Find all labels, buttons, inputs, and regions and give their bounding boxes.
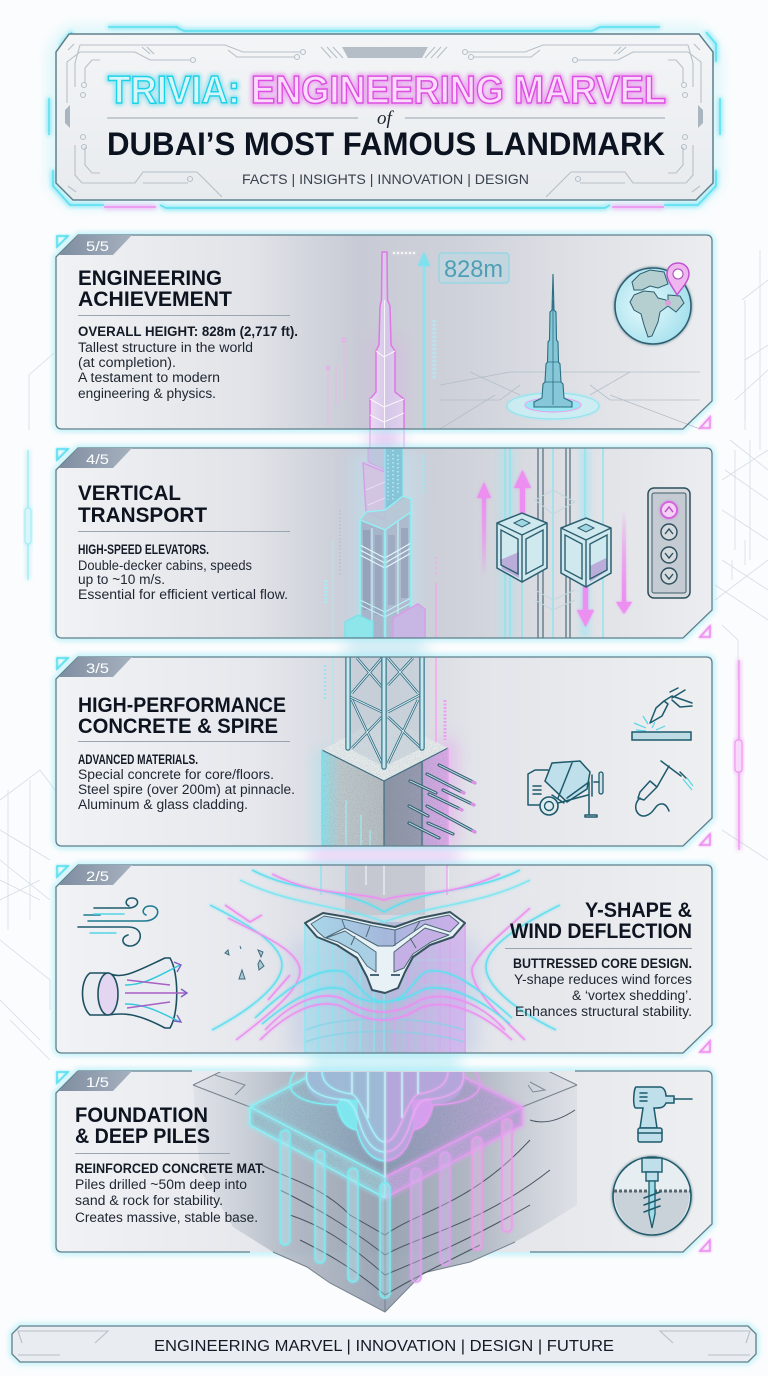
heading: ENGINEERING (78, 267, 222, 290)
panel body (56, 235, 712, 429)
body text: Special concrete for core/floors. (78, 767, 274, 782)
body text: sand & rock for stability. (75, 1193, 223, 1208)
banner outer glow frame (49, 27, 720, 208)
heading (78, 482, 207, 527)
right magenta glow rail (735, 660, 742, 850)
body text: Tallest structure in the world (78, 340, 253, 355)
corner marks (57, 1072, 710, 1251)
icon: elevator control panel (648, 488, 690, 598)
title banner (49, 27, 720, 208)
heading: HIGH-PERFORMANCE (78, 694, 286, 717)
footer frame (12, 1326, 756, 1362)
body text: (at completion). (78, 355, 176, 370)
step tab (59, 448, 132, 468)
banner circuit decoration (65, 44, 703, 197)
step tab: 4/5 (86, 451, 109, 467)
divider (78, 314, 290, 316)
y-shaped plan section (305, 912, 465, 993)
heading: CONCRETE & SPIRE (78, 715, 278, 738)
tier cap (360, 496, 411, 530)
heading (78, 267, 232, 311)
lattice tower (348, 657, 422, 767)
heading: VERTICAL (78, 482, 181, 505)
body text: A testament to modern (78, 370, 220, 385)
foundation illustration (192, 1072, 578, 1313)
icon: power drill (634, 1087, 692, 1142)
mini tower hologram (507, 274, 599, 419)
icon: blow torch (636, 761, 693, 816)
of divider: of (377, 108, 394, 129)
body text: HIGH-SPEED ELEVATORS. (78, 542, 209, 557)
corner marks (57, 866, 710, 1052)
blueprint wireframe background (0, 250, 768, 1060)
panel body (56, 657, 712, 846)
body text: & ‘vortex shedding’. (572, 988, 692, 1003)
body text (513, 956, 692, 1019)
body text: Y-shape reduces wind forces (514, 972, 692, 987)
body text: REINFORCED CONCRETE MAT. (75, 1161, 265, 1176)
heading: ACHIEVEMENT (78, 288, 232, 311)
body text: Aluminum & glass cladding. (78, 797, 248, 812)
body text (78, 324, 298, 401)
rebar rods (409, 765, 475, 838)
main title: Trivia: Engineering Marvel: ENGINEERING MARVEL (251, 69, 666, 112)
heading: Y-SHAPE & (585, 899, 692, 922)
outline (56, 235, 712, 429)
step tab: 3/5 (86, 660, 109, 676)
icon: drill bit into ground (613, 1157, 691, 1235)
steel lattice and concrete core (316, 657, 456, 846)
body text: engineering & physics. (78, 386, 216, 401)
outline (56, 657, 712, 846)
panel 1/5: foundation and deep piles (56, 1037, 712, 1312)
concrete mat (246, 1074, 526, 1201)
panel body (56, 1071, 712, 1252)
heading (78, 694, 286, 738)
icon: wind tunnel cone (82, 958, 187, 1028)
body text: Enhances structural stability. (515, 1004, 692, 1019)
height arrow (393, 252, 434, 429)
body text: OVERALL HEIGHT: 828m (2,717 ft). (78, 324, 298, 339)
main title: Trivia: Engineering Marvel: TRIVIA: (108, 69, 240, 112)
828m readout: 828m (444, 256, 503, 283)
tagline: FACTS | INSIGHTS | INNOVATION | DESIGN (242, 171, 529, 187)
body text (78, 542, 288, 602)
heading (510, 899, 692, 943)
outline (56, 865, 712, 1053)
step tab: 2/5 (86, 868, 109, 884)
body text: Creates massive, stable base. (75, 1210, 258, 1225)
debris fragments (225, 946, 264, 979)
footer bar (12, 1326, 756, 1362)
body text (78, 752, 295, 812)
divider (505, 948, 692, 950)
heading (75, 1104, 210, 1148)
tower mid section (326, 448, 436, 640)
outline (56, 1071, 712, 1252)
elevator direction arrows (477, 470, 632, 627)
concrete block (322, 716, 448, 846)
panel 3/5: concrete and spire (56, 657, 712, 846)
body text: up to ~10 m/s. (78, 572, 165, 587)
panel 2/5: y-shape and wind deflection (56, 865, 712, 1053)
left cyan glow rail (25, 450, 31, 580)
icon: elevator cabin left (497, 513, 547, 582)
footer text: ENGINEERING MARVEL | INNOVATION | DESIGN | FUTURE (154, 1338, 614, 1355)
flared tower base (290, 1071, 480, 1177)
main tier (360, 498, 411, 638)
y-shaped tower core (290, 865, 480, 1053)
step tab (59, 235, 132, 255)
heading: TRANSPORT (78, 504, 207, 527)
outline (56, 448, 712, 638)
body text (75, 1161, 265, 1225)
step tab (59, 1071, 132, 1091)
panel body (56, 865, 712, 1053)
holographic city grid (440, 372, 700, 429)
tower spire section (326, 252, 404, 430)
corner marks (57, 236, 710, 428)
icon: elevator cabin right (561, 518, 611, 587)
body text: Steel spire (over 200m) at pinnacle. (78, 782, 295, 797)
body text: Essential for efficient vertical flow. (78, 587, 288, 602)
step tab (59, 865, 132, 885)
heading: FOUNDATION (75, 1104, 208, 1127)
divider (78, 530, 290, 532)
step tab: 5/5 (86, 238, 109, 254)
icon: globe with location pin (615, 263, 691, 344)
icon: wind swirls (78, 898, 158, 946)
subtitle landmark: DUBAI’S MOST FAMOUS LANDMARK (107, 126, 665, 162)
body text: BUTTRESSED CORE DESIGN. (513, 956, 692, 971)
icon: concrete mixer (528, 761, 603, 817)
wind stream lines (210, 870, 560, 1040)
lower tier lobes (345, 604, 425, 638)
step tab (59, 657, 132, 677)
body text: ADVANCED MATERIALS. (78, 752, 198, 767)
heading: & DEEP PILES (75, 1125, 210, 1148)
rock block (193, 1071, 577, 1312)
body text: Double-decker cabins, speeds (78, 558, 252, 573)
corner marks (57, 658, 710, 845)
icon: welding on plate (632, 688, 692, 740)
upper tier (363, 448, 403, 520)
panel 5/5: engineering achievement (56, 235, 712, 430)
body text: Piles drilled ~50m deep into (75, 1177, 247, 1192)
banner panel (56, 34, 713, 200)
elevator shafts (498, 448, 603, 638)
panel body (56, 448, 712, 638)
divider (78, 740, 290, 742)
divider (75, 1152, 230, 1154)
step tab: 1/5 (86, 1074, 109, 1090)
panel 4/5: vertical transport (56, 448, 712, 640)
spire link across first gap (370, 429, 404, 448)
corner marks (57, 449, 710, 637)
deep piles (280, 1119, 512, 1298)
tower connecting glow between panels (310, 428, 460, 1074)
heading: WIND DEFLECTION (510, 920, 692, 943)
